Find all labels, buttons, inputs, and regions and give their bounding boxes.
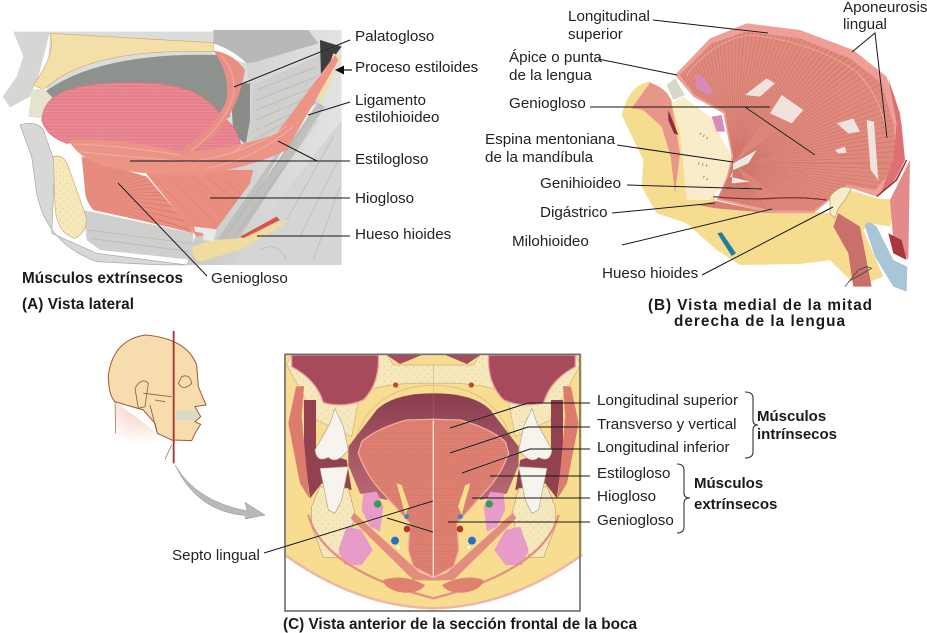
genioglossus	[82, 156, 194, 234]
neck fat behind hyoid	[830, 190, 897, 287]
arrow	[175, 465, 265, 519]
sinus	[292, 355, 378, 405]
label: Hueso hioides	[602, 265, 699, 282]
floor of mouth	[83, 210, 193, 260]
heading: Músculos extrínsecos	[22, 270, 183, 287]
panel C: frontal section illustration	[285, 354, 582, 611]
palate fat	[355, 385, 434, 440]
epiglottis wall	[890, 160, 910, 260]
label: Longitudinal superior	[597, 392, 738, 409]
label: Transverso y vertical	[597, 416, 737, 433]
label: Hiogloso	[355, 190, 414, 207]
teeth	[176, 411, 197, 420]
group label: Músculos	[694, 475, 763, 492]
tongue	[42, 83, 241, 160]
submandibular gland	[338, 527, 373, 565]
label: Longitudinal	[568, 8, 650, 25]
caption B line 2: derecha de la lengua	[674, 313, 845, 330]
skull	[108, 335, 206, 441]
palatoglossus	[177, 51, 245, 155]
vessels	[374, 500, 381, 508]
lower lip mucosa	[632, 83, 680, 193]
caption A: (A) Vista lateral	[22, 296, 134, 313]
label: Palatogloso	[355, 28, 434, 45]
cheek muscle	[288, 386, 309, 498]
mandible bone	[53, 156, 86, 238]
right half (mirror)	[433, 354, 582, 608]
section line	[171, 331, 176, 463]
tongue half	[358, 419, 434, 577]
left half of section	[285, 354, 434, 608]
group label: extrínsecos	[694, 496, 777, 513]
jaw and eye lines	[143, 376, 192, 432]
lingual septum	[431, 421, 435, 577]
brace: intrinsic muscles	[745, 392, 758, 458]
group label: Músculos	[757, 408, 826, 425]
labels panel C	[172, 392, 837, 633]
label: Estilogloso	[597, 465, 670, 482]
tongue body muscle	[680, 32, 897, 211]
brace: extrinsic muscles	[677, 464, 690, 533]
outer digastric arc	[308, 515, 434, 598]
dark cervical gap	[320, 40, 342, 100]
sublingual gland	[362, 492, 383, 532]
hyoid bone	[830, 187, 852, 218]
label: Genihioideo	[540, 175, 621, 192]
jaw fat and chin	[622, 82, 833, 265]
label: Hueso hioides	[355, 226, 452, 243]
label: Digástrico	[540, 204, 608, 221]
airway blue	[865, 222, 907, 292]
mylohyoid band	[351, 513, 434, 581]
white aponeurotic patches	[745, 78, 775, 97]
label: Geniogloso	[211, 270, 288, 287]
digastric and mylohyoid	[697, 201, 773, 213]
upper lip and nose in section	[3, 32, 50, 107]
leader lines	[118, 20, 887, 553]
upper tooth	[315, 408, 348, 460]
ear	[135, 381, 148, 408]
label: de la lengua	[509, 67, 592, 84]
digastric oval	[383, 578, 425, 593]
neck shading	[115, 402, 165, 450]
palate bone	[33, 33, 213, 89]
label: lingual	[843, 16, 887, 33]
pharynx muscle column	[833, 213, 872, 287]
superior longitudinal band	[687, 35, 887, 137]
hyoid bone	[193, 219, 287, 262]
rough posterior mucosa	[880, 78, 905, 195]
panel A: lateral view illustration	[3, 30, 342, 265]
neck and pharynx background	[187, 30, 342, 265]
vestibule	[304, 400, 352, 498]
right neck muscles	[233, 120, 342, 265]
label: Septo lingual	[172, 547, 260, 564]
lower lip and chin skin	[20, 123, 187, 265]
label: Estilogloso	[355, 151, 428, 168]
lingual glands	[695, 75, 713, 95]
skin edge	[285, 555, 434, 608]
artist signature	[845, 267, 872, 287]
pharyngeal wall	[245, 53, 322, 149]
stylohyoid ligament and digastric	[210, 100, 325, 250]
caption B: (B) Vista medial de la mitad	[648, 297, 872, 314]
head diagram with section line	[108, 331, 265, 519]
label: Espina mentoniana	[485, 131, 616, 148]
lower jaw bone	[312, 487, 355, 557]
lower tooth	[320, 467, 348, 513]
hyoglossus	[143, 170, 253, 237]
submandibular vein	[717, 232, 736, 256]
tongue body mucosa	[675, 23, 905, 213]
label: Proceso estiloides	[355, 59, 479, 76]
label: Geniogloso	[509, 95, 586, 112]
yellow septum slit	[397, 483, 409, 515]
label: estilohioideo	[355, 109, 439, 126]
back of neck	[115, 402, 172, 459]
label: Ápice o punta	[509, 49, 602, 66]
maxillary bone	[287, 354, 434, 437]
incisor region	[28, 88, 53, 118]
oral cavity	[45, 55, 231, 140]
mandible bone	[672, 97, 732, 200]
arrow: styloid process	[335, 66, 352, 74]
styloid process	[317, 53, 341, 102]
labels panel B	[485, 0, 927, 330]
styloglossus	[68, 55, 338, 175]
bone marrow dots	[698, 133, 710, 180]
genioglossus fan fibers	[640, 70, 827, 257]
background fat	[285, 354, 434, 608]
label: superior	[568, 26, 623, 43]
labels panel A	[22, 28, 479, 313]
tongue tip frenulum	[667, 78, 685, 100]
panel B: medial view illustration	[622, 23, 910, 292]
label: Ligamento	[355, 92, 426, 109]
label: Longitudinal inferior	[597, 439, 730, 456]
label: Milohioideo	[512, 233, 589, 250]
dark muscle seams	[713, 160, 907, 200]
frame	[285, 354, 580, 611]
label: Hiogloso	[597, 488, 656, 505]
group label: intrínsecos	[757, 426, 837, 443]
palate vessel	[393, 382, 398, 388]
oral cavity	[348, 393, 434, 500]
label: de la mandíbula	[485, 149, 594, 166]
label: Geniogloso	[597, 512, 674, 529]
caption C: (C) Vista anterior de la sección frontal de la boca	[283, 616, 637, 633]
